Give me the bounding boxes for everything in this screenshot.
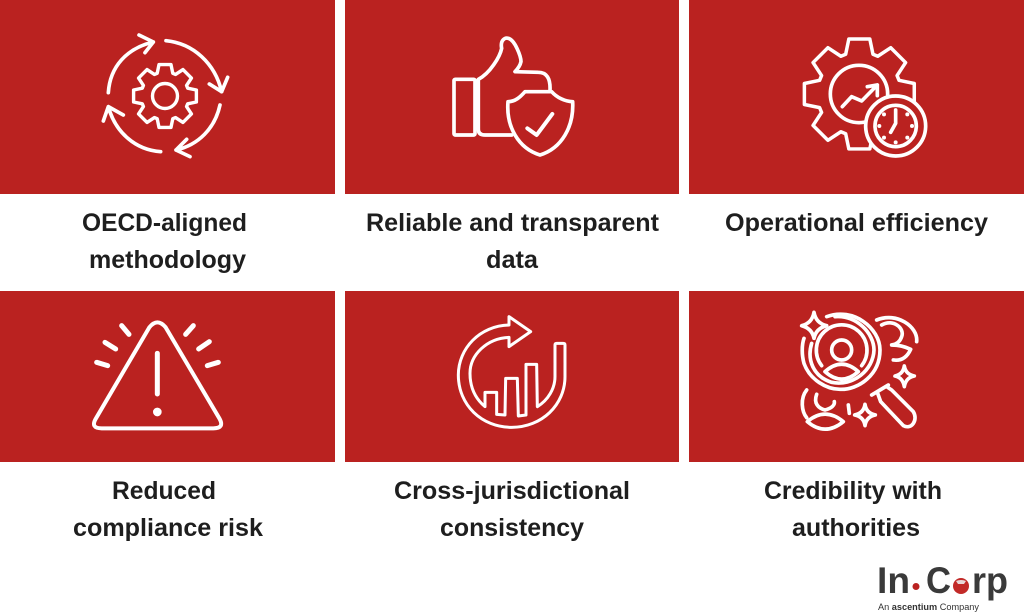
logo: InCorp: In [877,560,910,601]
icon: magnifier over person with sparkles [802,312,917,429]
heading: Reliable and transparent data [366,209,660,274]
panel: Operational efficiency [689,0,1024,194]
heading: Reduced compliance risk: compliance risk [73,514,263,542]
panel: Reliable and transparent data [345,0,679,194]
icon: globe [953,578,969,594]
panel: Reduced compliance risk [0,291,335,462]
logo: InCorp: An ascentium Company [878,602,979,612]
heading: OECD-aligned methodology: methodology [89,246,246,274]
heading: Operational efficiency: Operational efficiency [725,209,988,237]
heading: Credibility with authorities [764,477,942,542]
icon: warning triangle [94,322,221,428]
heading: Credibility with authorities: Credibility with [764,477,942,505]
heading: Reliable and transparent data: Reliable and transparent [366,209,660,237]
heading: OECD-aligned methodology: OECD-aligned [82,209,247,237]
icon: thumbs up with shield [454,38,573,155]
logo: InCorp: rp [972,560,1008,601]
heading: Credibility with authorities: authorities [792,514,920,542]
icon: circular arrow with rising bars [458,317,565,427]
heading: Reduced compliance risk [73,477,263,542]
heading: OECD-aligned methodology [82,209,247,274]
panel: Cross-jurisdictional consistency [345,291,679,462]
panel: OECD-aligned methodology [0,0,335,194]
logo: InCorp [877,560,1008,612]
heading: Cross-jurisdictional consistency: consistency [440,514,584,542]
icon: gear with cycle arrows [103,35,228,157]
heading: Cross-jurisdictional consistency [394,477,630,542]
logo: InCorp: C [926,560,951,601]
panel: Credibility with authorities [689,291,1024,462]
heading: Cross-jurisdictional consistency: Cross-jurisdictional [394,477,630,505]
heading: Reduced compliance risk: Reduced [112,477,216,505]
icon: gear with chart and clock [804,39,926,156]
heading: Reliable and transparent data: data [486,246,539,274]
